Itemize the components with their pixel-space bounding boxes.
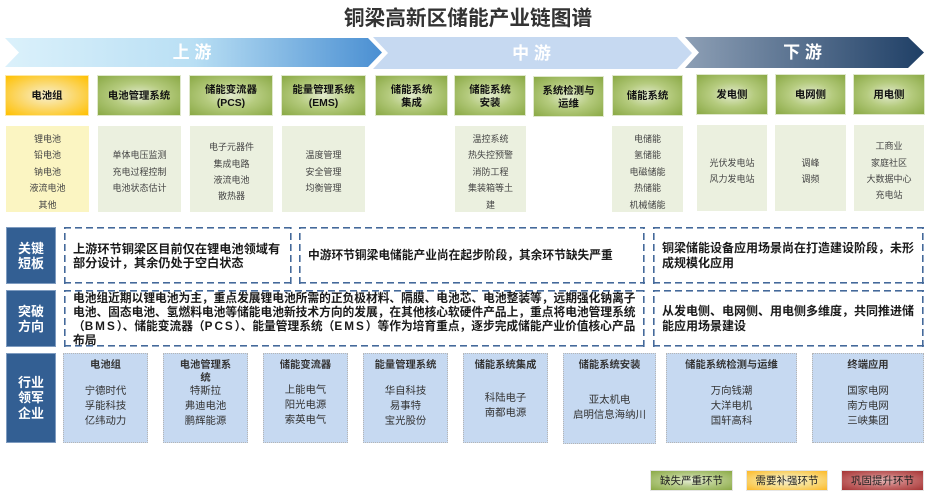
list: battery types: 铅电池	[34, 150, 61, 160]
list: consumer side uses: 家庭社区	[871, 158, 907, 168]
node: system integration	[375, 75, 448, 116]
card: BMS companies: 电池管理系	[180, 360, 231, 370]
list: grid side uses: 调频	[801, 174, 820, 184]
list: consumer side uses	[854, 125, 924, 211]
list: installation items	[455, 126, 526, 212]
card: testing and operations companies: 万向钱潮	[711, 386, 752, 397]
list: installation items: 建	[486, 200, 495, 210]
card: end application companies: 三峡集团	[847, 416, 889, 427]
arrow: downstream banner	[685, 37, 924, 68]
card: BMS companies: 弗迪电池	[185, 401, 226, 412]
text: downstream gap	[653, 227, 924, 284]
text: downstream direction: 从发电侧、电网侧、用电侧多维度，共同推进储能应用场景建设	[662, 304, 914, 332]
card: integration companies	[463, 353, 548, 443]
list: battery types: 液流电池	[29, 183, 66, 193]
list: EMS functions	[282, 126, 365, 212]
card: PCS companies: 索英电气	[285, 415, 326, 426]
list: installation items: 消防工程	[472, 167, 508, 177]
list: generation side uses: 风力发电站	[709, 174, 754, 184]
node: testing and operations: 运维	[558, 98, 579, 110]
list: generation side uses	[697, 125, 767, 211]
row label: leading companies: 行业	[18, 375, 44, 390]
list: consumer side uses: 大数据中心	[866, 174, 912, 184]
card: testing and operations companies: 储能系统检测与运维	[685, 360, 778, 370]
list: storage types: 机械储能	[629, 200, 666, 210]
node: system integration: 储能系统	[391, 85, 432, 96]
list: PCS components: 液流电池	[213, 175, 250, 185]
row label: breakthrough direction: 突破	[18, 304, 44, 318]
node: BMS	[97, 75, 181, 116]
node: generation side: 发电侧	[716, 90, 748, 101]
arrow: upstream banner: 上 游	[173, 42, 211, 62]
card: PCS companies	[263, 353, 348, 443]
card: BMS companies	[163, 353, 248, 443]
card: EMS companies: 易事特	[390, 401, 421, 412]
node: PCS	[189, 75, 273, 116]
node: battery pack	[5, 75, 89, 116]
card: battery pack companies: 宁德时代	[85, 386, 126, 397]
card: integration companies: 储能系统集成	[475, 360, 536, 370]
node: EMS: 能量管理系统	[292, 85, 355, 96]
node: storage system	[612, 75, 683, 116]
card: end application companies: 南方电网	[847, 401, 889, 412]
text: upstream gap	[64, 227, 292, 284]
card: testing and operations companies: 大洋电机	[711, 401, 752, 412]
legend: consolidate and upgrade: 巩固提升环节	[851, 475, 914, 487]
card: end application companies: 终端应用	[847, 360, 889, 370]
card: end application companies: 国家电网	[847, 386, 889, 397]
text: upstream and midstream direction: （BMS）、储能变流器（PCS）、能量管理系统（EMS）等作为培育重点，逐步完成储能产业价值核心产品	[73, 320, 635, 332]
text: downstream gap: 铜梁储能设备应用场景尚在打造建设阶段，未形成规模化应用	[662, 241, 914, 270]
node: testing and operations	[533, 76, 604, 117]
list: EMS functions: 安全管理	[305, 167, 342, 177]
card: battery pack companies	[63, 353, 148, 443]
list: storage types: 电磁储能	[629, 167, 666, 177]
legend: needs strengthening	[746, 470, 828, 491]
row label: leading companies: 领军	[18, 390, 44, 405]
legend: needs strengthening: 需要补强环节	[756, 475, 818, 487]
list: PCS components: 集成电路	[213, 159, 250, 169]
node: PCS: 储能变流器	[205, 85, 257, 96]
list: BMS functions: 电池状态估计	[112, 183, 166, 193]
node: storage system: 储能系统	[627, 91, 668, 102]
arrow: upstream banner	[5, 38, 382, 67]
row label: leading companies: 企业	[18, 406, 44, 421]
card: battery pack companies: 亿纬动力	[85, 416, 126, 427]
legend: consolidate and upgrade	[841, 470, 924, 491]
node: consumer side	[853, 74, 925, 115]
text: midstream gap	[299, 227, 645, 284]
list: consumer side uses: 充电站	[875, 190, 902, 200]
list: storage types	[612, 126, 683, 212]
list: BMS functions	[98, 126, 181, 212]
card: PCS companies: 上能电气	[285, 385, 326, 396]
list: grid side uses	[775, 125, 846, 211]
row label: leading companies	[6, 353, 56, 443]
text: upstream and midstream direction	[64, 290, 645, 347]
card: end application companies	[812, 353, 924, 443]
card: installation companies	[563, 353, 656, 444]
card: EMS companies: 华自科技	[385, 386, 426, 397]
card: EMS companies: 能量管理系统	[375, 360, 436, 370]
list: PCS components: 电子元器件	[209, 142, 254, 152]
card: BMS companies: 统	[200, 372, 211, 384]
node: testing and operations: 系统检测与	[543, 86, 594, 97]
list: EMS functions: 温度管理	[305, 150, 342, 160]
card: installation companies: 亚太机电	[589, 395, 630, 406]
card: EMS companies: 宝光股份	[385, 416, 426, 427]
node: system installation	[454, 75, 526, 116]
list: PCS components: 散热器	[218, 191, 245, 201]
node: grid side: 电网侧	[795, 90, 826, 101]
node: grid side	[775, 74, 846, 115]
list: EMS functions: 均衡管理	[305, 183, 342, 193]
node: EMS	[281, 75, 366, 116]
list: storage types: 氢储能	[634, 150, 661, 160]
card: integration companies: 南都电源	[485, 408, 526, 419]
card: PCS companies: 储能变流器	[280, 360, 331, 370]
text: upstream and midstream direction: 电池组近期以锂电池为主，重点发展锂电池所需的正负极材料、隔膜、电池芯、电池整装等，远期强化钠离子	[73, 292, 636, 304]
card: EMS companies	[363, 353, 448, 443]
card: testing and operations companies	[666, 353, 797, 443]
list: grid side uses: 调峰	[801, 158, 820, 168]
list: storage types: 电储能	[634, 134, 661, 144]
node: BMS: 电池管理系统	[108, 91, 170, 102]
row label: key gaps: 关键	[18, 240, 44, 256]
arrow: midstream banner: 中 游	[512, 43, 551, 63]
node: system installation: 储能系统	[469, 85, 511, 96]
row label: key gaps	[6, 227, 56, 284]
arrow: downstream banner: 下 游	[783, 42, 822, 62]
title: 铜梁高新区储能产业链图谱	[344, 7, 592, 30]
node: battery pack: 电池组	[31, 91, 63, 102]
card: PCS companies: 阳光电源	[285, 400, 326, 411]
node: generation side	[696, 74, 768, 115]
card: BMS companies: 特斯拉	[190, 386, 221, 397]
list: battery types: 其他	[38, 200, 56, 210]
legend: severe gap	[650, 470, 733, 491]
legend: severe gap: 缺失严重环节	[660, 475, 723, 487]
text: upstream and midstream direction: 布局	[73, 334, 96, 346]
row label: breakthrough direction: 方向	[18, 318, 44, 334]
list: consumer side uses: 工商业	[875, 141, 902, 151]
card: installation companies: 启明信息海纳川	[573, 410, 646, 421]
list: installation items: 热失控预警	[468, 150, 513, 160]
list: BMS functions: 单体电压监测	[112, 150, 166, 160]
card: installation companies: 储能系统安装	[579, 360, 640, 370]
node: system integration: 集成	[401, 98, 422, 108]
node: consumer side: 用电侧	[873, 90, 905, 101]
list: generation side uses: 光伏发电站	[709, 158, 754, 168]
text: downstream direction	[653, 290, 924, 347]
list: installation items: 集装箱等土	[468, 183, 513, 193]
text: upstream and midstream direction: 电池、固态电池、氢燃料电池等储能电池新技术方向的发展，在其他核心软硬件产品上，重点将电池管理系统	[73, 306, 636, 318]
node: PCS: (PCS)	[217, 98, 245, 108]
list: battery types: 锂电池	[34, 134, 61, 144]
card: testing and operations companies: 国轩高科	[711, 416, 752, 427]
card: integration companies: 科陆电子	[485, 393, 526, 404]
arrow: midstream banner	[373, 37, 692, 69]
row label: breakthrough direction	[6, 290, 56, 347]
list: BMS functions: 充电过程控制	[112, 167, 166, 177]
card: BMS companies: 鹏辉能源	[185, 416, 226, 427]
row label: key gaps: 短板	[18, 256, 44, 270]
card: battery pack companies: 孚能科技	[85, 401, 126, 412]
text: midstream gap: 中游环节铜梁电储能产业尚在起步阶段，其余环节缺失严重	[308, 248, 613, 262]
list: storage types: 热储能	[634, 183, 661, 193]
list: battery types: 钠电池	[34, 167, 61, 177]
card: battery pack companies: 电池组	[90, 360, 121, 370]
node: system installation: 安装	[480, 98, 500, 108]
list: installation items: 温控系统	[472, 134, 508, 144]
list: PCS components	[190, 126, 273, 212]
text: upstream gap: 上游环节铜梁区目前仅在锂电池领域有部分设计，其余仍处于空白状态	[73, 242, 280, 270]
node: EMS: (EMS)	[309, 98, 338, 108]
list: battery types	[6, 126, 89, 212]
